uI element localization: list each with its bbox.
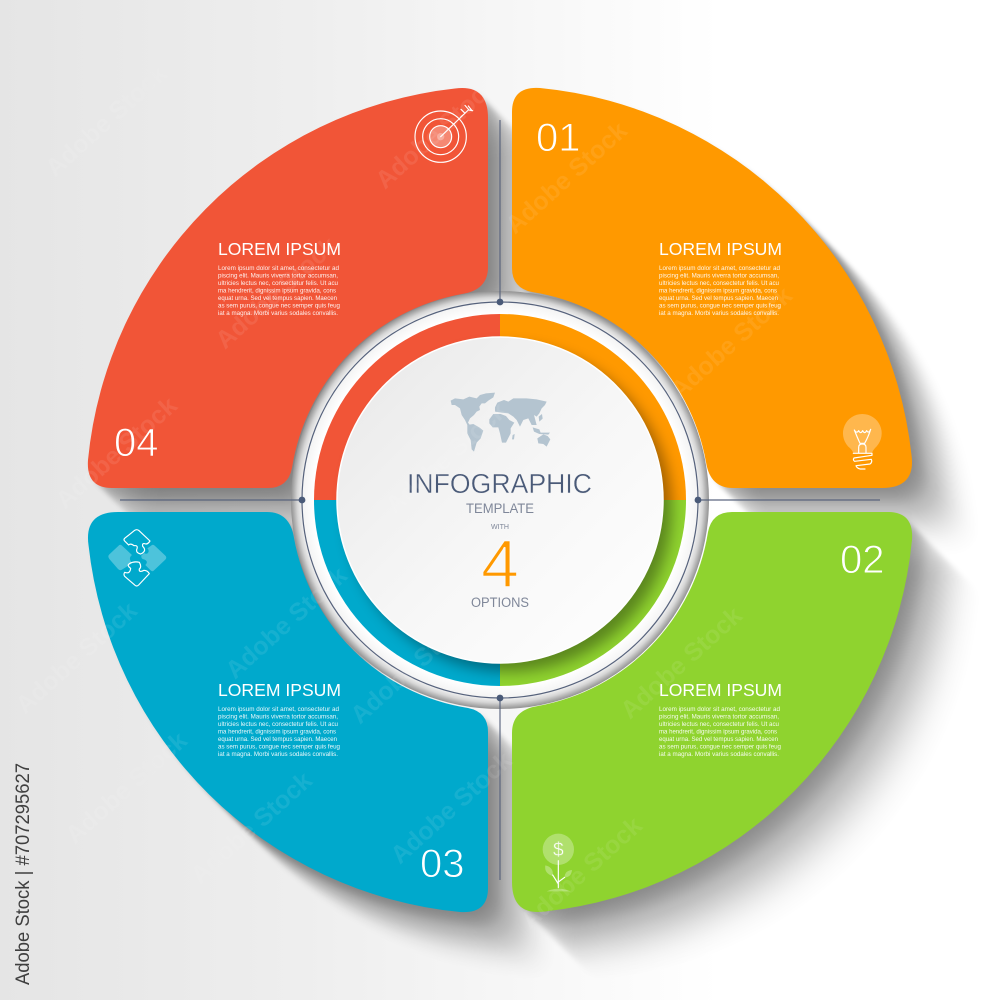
centre white disc [337,337,663,663]
body text: Lorem ipsum dolor sit amet, consectetur ad [659,265,780,272]
watermark: Adobe Stock [220,561,353,684]
body text: ma hendrerit, dignissim ipsum gravida, cons [659,288,778,294]
body text: equat urna. Sed vel tempus sapien. Maecen [218,736,337,743]
body text: as sem purus, congue nec semper quis feug [659,744,781,750]
icon: money plant [543,834,574,891]
watermark: Adobe Stock [615,601,748,724]
heading: LOREM IPSUM [659,680,782,700]
icon: puzzle pieces [108,530,166,586]
body text [218,265,340,317]
icon: light bulb [843,414,882,469]
body text: Lorem ipsum dolor sit amet, consectetur ad [218,265,339,272]
watermark: Adobe Stock [345,606,478,729]
body text: as sem purus, congue nec semper quis feug [659,302,781,310]
body text: ultricies lectus nec, consectetur felis. Ut acu [218,721,338,728]
red panel shape [88,88,488,488]
subtitle: template: TEMPLATE [466,500,534,516]
body text: piscing elit. Mauris viverra tortor accumsan, [218,714,338,720]
body text: piscing elit. Mauris viverra tortor accumsan, [659,714,779,720]
world map [451,393,550,452]
watermark: Adobe Stock [370,71,503,194]
body text: ultricies lectus nec, consectetur felis. Ut acu [659,721,779,728]
panel: orange, option 01 [512,88,912,488]
centre title: INFOGRAPHIC [407,468,592,499]
connector lines and ring line [120,120,880,880]
body text: equat urna. Sed vel tempus sapien. Maecen [659,736,778,743]
body text: equat urna. Sed vel tempus sapien. Maecen [659,295,778,302]
panel: blue, option 03 [88,512,488,912]
icon: money plant: $ [553,840,564,861]
number 01: 01 [536,116,580,160]
body text: Lorem ipsum dolor sit amet, consectetur ad [218,706,339,713]
body text: iat a magna. Morbi varius sodales convallis. [659,310,779,317]
icon: target with arrow [415,105,473,162]
watermark: Adobe Stock [210,231,343,354]
body text: as sem purus, congue nec semper quis feug [218,744,340,750]
body text: ultricies lectus nec, consectetur felis. Ut acu [659,280,779,287]
heading: LOREM IPSUM [659,239,782,259]
watermark: Adobe Stock [185,766,318,889]
gap around the centre ring [291,291,709,709]
body text: ma hendrerit, dignissim ipsum gravida, cons [218,288,337,294]
centre coloured ring [314,314,686,686]
long shadows of the four panels [90,90,977,977]
body text: equat urna. Sed vel tempus sapien. Maecen [218,295,337,302]
orange panel shape [512,88,912,488]
green panel shape [512,512,912,912]
body text: piscing elit. Mauris viverra tortor accumsan, [659,272,779,280]
body text [218,706,340,758]
watermark: Adobe Stock [510,451,643,574]
body text: iat a magna. Morbi varius sodales convallis. [218,310,338,317]
watermark: Adobe Stock [665,281,798,404]
body text: iat a magna. Morbi varius sodales convallis. [659,751,779,758]
stock id side label: Adobe Stock | #707295627 [13,763,34,985]
watermark: Adobe Stock [500,116,633,239]
watermark: Adobe Stock [825,121,958,244]
watermark: Adobe Stock [380,396,513,519]
heading: LOREM IPSUM [218,239,341,259]
body text: piscing elit. Mauris viverra tortor accumsan, [218,272,338,280]
watermark: Adobe Stock [50,391,183,514]
number 02: 02 [840,538,884,582]
panel: red, option 04 [88,88,488,488]
body text [659,265,781,317]
watermark: Adobe Stock [515,811,648,934]
blue panel shape [88,512,488,912]
big number 4: 4 [481,526,519,602]
number 04: 04 [114,421,158,465]
body text: ma hendrerit, dignissim ipsum gravida, cons [659,728,778,736]
body text: ultricies lectus nec, consectetur felis. Ut acu [218,280,338,287]
panel: green, option 02 [512,512,912,912]
heading: LOREM IPSUM [218,680,341,700]
subtitle: options: OPTIONS [471,595,529,610]
body text: iat a magna. Morbi varius sodales convallis. [218,751,338,758]
body text: Lorem ipsum dolor sit amet, consectetur ad [659,706,780,713]
watermark: Adobe Stock [40,59,173,182]
body text: as sem purus, congue nec semper quis feug [218,302,340,310]
body text [659,706,781,758]
watermark: Adobe Stock [60,726,193,849]
number 03: 03 [420,842,464,886]
body text: ma hendrerit, dignissim ipsum gravida, cons [218,728,337,736]
subtitle: with: WITH [491,522,509,531]
watermark: Adobe Stock [385,746,518,869]
watermark: Adobe Stock [10,596,143,719]
